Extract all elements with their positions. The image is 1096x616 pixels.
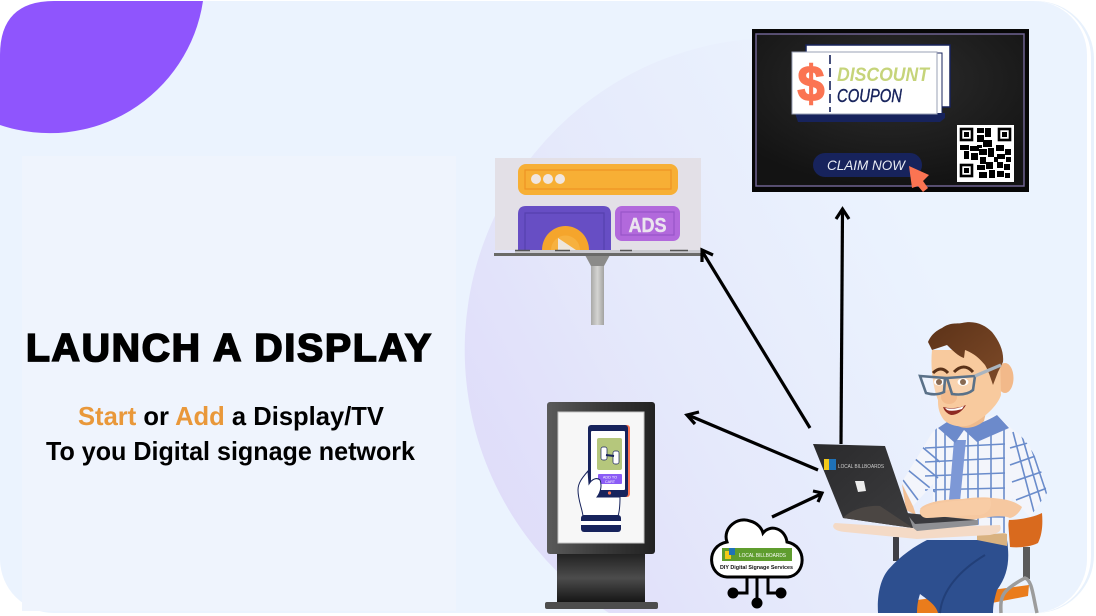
chair [893,513,1042,613]
kiosk frame [547,402,655,554]
laptop lid [813,444,913,528]
ear [996,363,1014,393]
laptop lid: LOCAL BILLBOARDS [838,464,884,470]
decorative purple quarter circle [0,1,203,133]
coupon ticket: DISCOUNT [837,65,930,86]
jeans [878,540,1008,613]
local billboards logo: LOCAL BILLBOARDS [739,553,787,559]
placket [949,440,966,500]
eyes [934,378,968,386]
knee fold [940,555,985,613]
shirt check pattern [903,425,1047,533]
orange address bar [518,164,678,195]
large lavender circle behind displays [465,38,1000,613]
laptop base and keyboard [906,513,978,531]
kiosk base [557,554,645,602]
billboard [494,158,701,325]
arrow: cloud to laptop [772,491,822,517]
shirt body and sleeves [902,416,1047,534]
dollar sign: $ [798,56,825,112]
text panel [22,156,456,611]
board face [495,158,701,250]
coupon ticket: COUPON [837,86,903,106]
cloud service icon: DIY Digital Signage Services [720,565,793,571]
TV screen: discount coupon [752,29,1029,192]
arrow: laptop to kiosk [687,412,818,470]
cloud service icon [712,520,802,608]
front fingers [920,499,991,518]
hand holding phone: ADD TO [603,476,617,480]
arrow: laptop to TV screen [836,209,849,444]
hair [928,322,1003,385]
subtitle line 2: To you Digital signage network [46,436,416,466]
hand holding phone [578,425,630,532]
subtitle line 1: Start or Add a Display/TV [78,401,385,431]
nose [941,390,957,404]
kiosk display [545,402,658,609]
purple video panel [518,206,611,250]
claim now button: CLAIM NOW [827,157,907,173]
coupon ticket [792,45,950,122]
eyebrows [933,367,973,373]
hand holding phone: CART [605,480,616,484]
left forearm [902,484,916,515]
title: LAUNCH A DISPLAY [26,327,431,370]
face [931,350,1001,426]
dumbbell icon [601,447,619,464]
glasses [920,365,1001,394]
belt [977,533,1007,546]
catwalk [494,253,701,256]
ads badge: ADS [628,215,666,237]
collar [938,415,1009,443]
right forearm and hand [920,497,1022,520]
person with laptop [813,322,1055,613]
neck [950,408,987,428]
QR code [957,125,1014,182]
claim now button [813,153,929,192]
smile [943,405,966,415]
pole [591,262,604,325]
ads badge [615,206,680,241]
arrow: laptop to billboard [702,250,810,428]
desk [833,523,1001,539]
